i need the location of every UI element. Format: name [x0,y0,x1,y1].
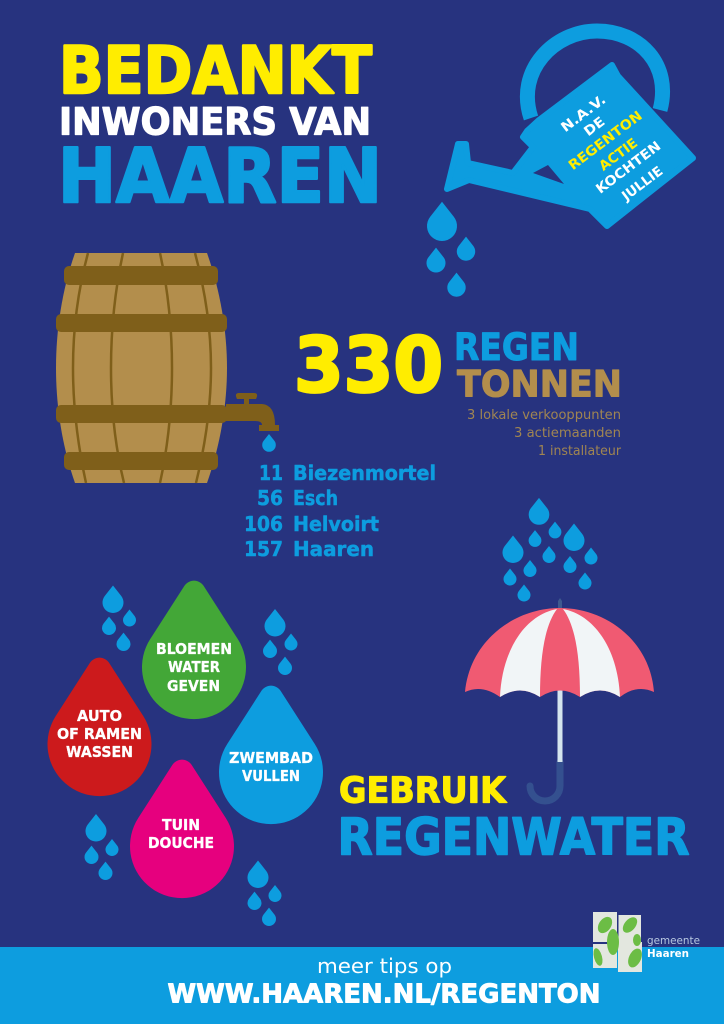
heading: gebruik regenwater: GEBRUIK [339,770,507,812]
drop: green [142,581,246,719]
tap drop [262,434,276,452]
number 330: 330 [294,320,443,410]
small drops decoration [84,585,298,926]
barrel hoops [56,266,227,470]
heading: gebruik regenwater: REGENWATER [338,808,690,866]
icon: rain barrel [56,253,279,483]
title line: haaren: HAAREN [58,132,382,220]
drop: red: AUTO [77,707,122,725]
title line: inwoners van: INWONERS VAN [59,100,371,144]
drop: red [47,658,152,796]
drop: pink: TUIN [162,816,200,834]
label: regen: REGEN [454,326,579,369]
logo: gemeente haaren: Haaren [647,948,689,960]
village counts list: Haaren [293,537,374,561]
can text: KOCHTEN [593,138,664,197]
title [58,34,382,220]
drop: green: GEVEN [167,677,220,695]
umbrella canopy [465,608,654,697]
can text: ACTIE [596,135,641,174]
barrel tap [226,393,279,431]
village counts list [244,461,436,561]
drop: green: BLOEMEN [156,640,232,658]
village counts list: 56 [257,486,283,510]
can text: REGENTON [566,108,646,174]
village counts list: Esch [293,486,338,510]
barrel body [56,253,227,483]
umbrella shaft [558,690,562,762]
label: tonnen: TONNEN [457,362,622,406]
logo text: gemeente [647,935,700,947]
umbrella tip [558,598,562,608]
can text [558,92,666,205]
icon: watering can [447,31,693,226]
sales details: 3 actiemaanden [514,426,621,441]
icon: rain above umbrella [502,498,598,601]
footer url: WWW.HAAREN.NL/REGENTON [168,980,600,1010]
barrel count [294,320,622,459]
village counts list: Helvoirt [293,512,379,536]
barrel staves [73,253,211,483]
drop: pink [130,760,234,898]
can handle [527,31,663,118]
can body and spout [447,65,693,226]
sales details: 3 lokale verkooppunten [467,408,621,423]
village counts list: Biezenmortel [293,461,436,485]
village counts list: 106 [244,512,283,536]
footer text: meer tips op: meer tips op [317,954,452,978]
sales details [467,408,622,459]
drop: blue [219,686,323,824]
umbrella handle [530,762,560,801]
drop: blue: VULLEN [242,767,300,785]
logo tiles [593,912,642,972]
icon: watering can drops [426,202,475,297]
drop: red: OF RAMEN [57,725,142,743]
village counts list: 11 [259,461,283,485]
icon: umbrella [465,598,654,801]
sales details: 1 installateur [538,444,622,459]
drop: blue: ZWEMBAD [229,749,313,767]
village counts list: 157 [244,537,283,561]
logo: gemeente haaren [592,912,700,972]
logo leaves [592,914,645,970]
drop: pink: DOUCHE [148,834,214,852]
drop: red: WASSEN [66,743,133,761]
canopy white panels [500,609,620,697]
use drops cluster [47,581,323,898]
heading: gebruik regenwater [338,770,690,866]
footer band [0,947,724,1024]
drop: green: WATER [168,658,220,676]
title line: bedankt: BEDANKT [59,34,372,109]
can text: N.A.V. [558,92,609,136]
can text: DE [581,114,608,140]
can text: JULLIE [618,163,666,205]
